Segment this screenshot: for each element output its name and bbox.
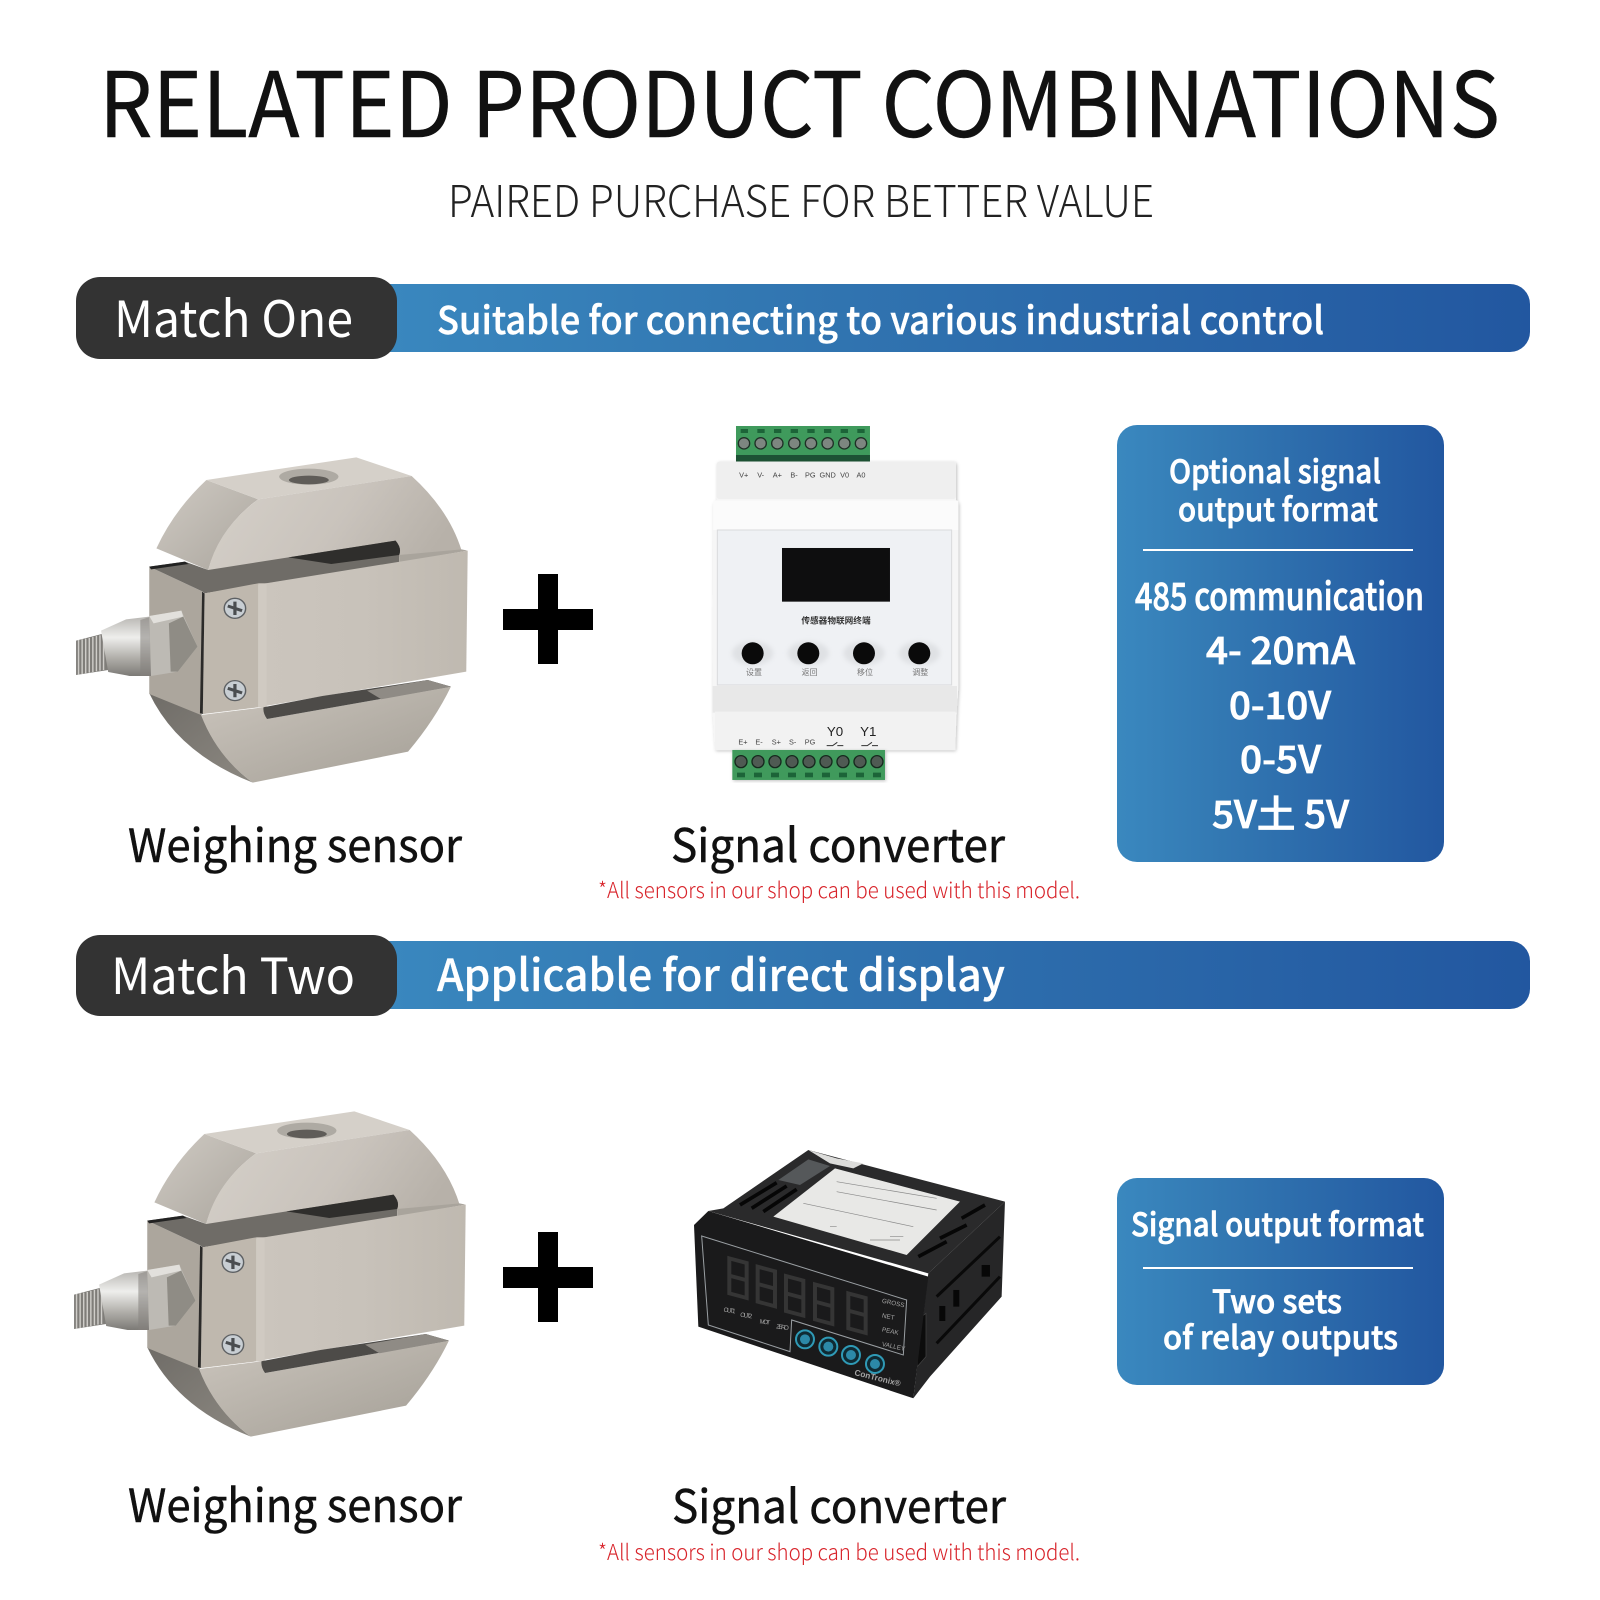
banner label: match one: Match One: [114, 280, 353, 352]
icon: plus 2: [503, 1232, 593, 1322]
banner description: Applicable for direct display: [437, 940, 1005, 1004]
product: digital display meter: VALLEY: [881, 1341, 906, 1353]
product: signal converter din-rail module: GND: [820, 470, 836, 479]
label: weighing sensor 1: Weighing sensor: [128, 810, 462, 876]
product: digital display meter: NET: [881, 1312, 895, 1322]
product: signal converter din-rail module: B-: [790, 470, 798, 479]
title: RELATED PRODUCT COMBINATIONS: [99, 33, 1500, 163]
product: digital display meter: MOT: [759, 1318, 771, 1327]
panel body: [1163, 1277, 1398, 1359]
product: digital display meter: ZERO: [776, 1323, 789, 1332]
product: signal converter din-rail module: A0: [856, 470, 865, 479]
product: signal converter din-rail module: PG: [805, 470, 816, 479]
product: signal converter din-rail module: S-: [789, 737, 797, 746]
product: signal converter din-rail module: Y1: [860, 724, 876, 739]
panel heading: output format: [1178, 485, 1378, 531]
product: signal converter din-rail module: S+: [772, 737, 781, 746]
product: signal converter din-rail module: E+: [738, 737, 748, 746]
panel: optional signal output format: [1117, 425, 1444, 862]
product: signal converter din-rail module: A+: [773, 470, 782, 479]
product: signal converter din-rail module: V0: [840, 470, 849, 479]
panel: signal output format: [1117, 1178, 1444, 1385]
product: weighing sensor 1: [76, 457, 468, 783]
brand: ConTronix®: [853, 1367, 903, 1389]
note: compatibility 2: *All sensors in our shop can be used with this model.: [598, 1535, 1080, 1567]
product: signal converter din-rail module: [713, 426, 958, 780]
product: signal converter din-rail module: PG: [805, 737, 816, 746]
product: digital display meter: OUT2: [740, 1312, 753, 1320]
product: digital display meter: GROSS: [881, 1298, 905, 1309]
panel body: Two sets: [1212, 1277, 1342, 1323]
product: signal converter din-rail module: 调整: [912, 667, 928, 677]
output format list: 485 communication: [1135, 566, 1424, 621]
label: signal converter 2: Signal converter: [672, 1471, 1006, 1537]
panel body: of relay outputs: [1163, 1313, 1398, 1359]
icon: plus 1: [503, 574, 593, 664]
product: digital display meter: PEAK: [881, 1326, 900, 1337]
panel heading: Signal output format: [1131, 1200, 1424, 1246]
label: weighing sensor 2: Weighing sensor: [128, 1470, 462, 1536]
panel heading: [1169, 447, 1381, 531]
output format list: 4- 20mA: [1206, 620, 1355, 675]
panel heading: Optional signal: [1169, 447, 1381, 493]
output format list: [1135, 566, 1424, 839]
product: signal converter din-rail module: 设置: [746, 667, 762, 677]
note: compatibility 1: *All sensors in our shop can be used with this model.: [598, 873, 1080, 905]
product: signal converter din-rail module: 移位: [857, 667, 873, 677]
output format list: 5V土 5V: [1212, 784, 1349, 839]
banner: match two: [76, 935, 1530, 1016]
product: digital display meter: OUT1: [723, 1307, 736, 1315]
label: signal converter 1: Signal converter: [671, 810, 1005, 876]
subtitle: PAIRED PURCHASE FOR BETTER VALUE: [448, 166, 1154, 230]
product: digital display meter: [694, 1150, 1005, 1398]
panel name: 传感器物联网终端: [801, 614, 871, 626]
product: signal converter din-rail module: Y0: [827, 724, 843, 739]
banner: match one: [76, 277, 1530, 359]
banner description: Suitable for connecting to various industrial control: [437, 290, 1324, 345]
product: signal converter din-rail module: 返回: [802, 668, 818, 677]
product: signal converter din-rail module: V-: [757, 470, 765, 479]
output format list: 0-10V: [1229, 675, 1331, 730]
product: signal converter din-rail module: V+: [739, 470, 748, 479]
banner label: match two: Match Two: [111, 937, 355, 1009]
output format list: 0-5V: [1240, 729, 1321, 784]
product: weighing sensor 2: [74, 1111, 466, 1437]
product: signal converter din-rail module: E-: [755, 737, 763, 746]
